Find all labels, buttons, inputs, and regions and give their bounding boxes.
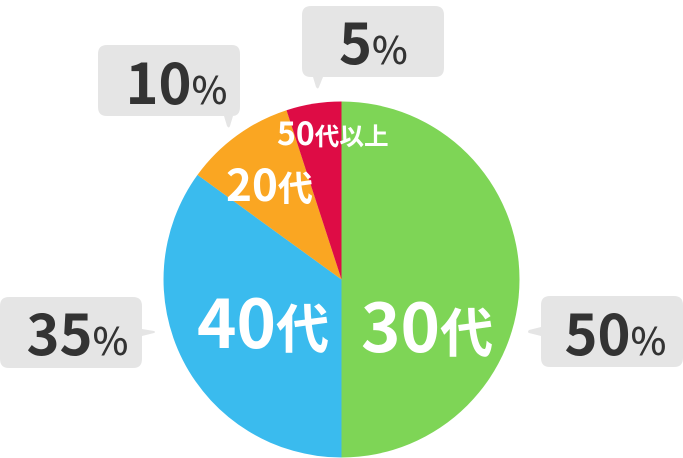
slice: 20s 10%: [198, 110, 342, 280]
callout: 10%: 10%: [126, 40, 227, 121]
callout: 5%: [302, 0, 444, 88]
pie chart: [164, 101, 520, 457]
slice: 30s 50%: [342, 102, 520, 458]
slice: 40s 35%: [164, 175, 342, 458]
label: 20s: 20代: [226, 150, 313, 214]
callout: 10%: [98, 40, 240, 128]
callout: 50%: 50%: [564, 291, 666, 372]
callout: 50%: [528, 291, 683, 372]
slice: 50s and over 5%: [286, 101, 342, 279]
callout: 35%: 35%: [26, 291, 128, 372]
callout: 35%: [0, 291, 155, 372]
label: 50s and over: 50代以上: [277, 109, 389, 155]
label: 30s: 30代: [361, 275, 493, 372]
callout: 5%: 5%: [339, 0, 408, 81]
label: 40s: 40代: [197, 271, 329, 368]
